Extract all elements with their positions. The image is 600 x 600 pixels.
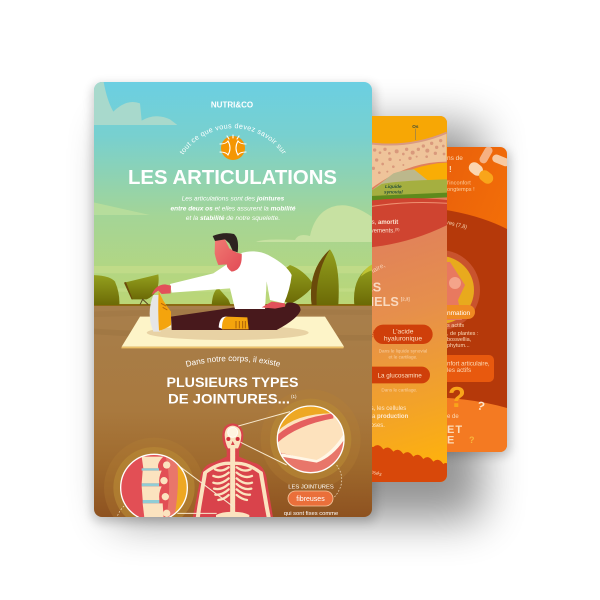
dashed connector: acide xyxy=(372,330,374,338)
label: liquide synovial: synovial xyxy=(384,189,403,194)
question mark: small: ? xyxy=(469,435,474,445)
scalloped wave xyxy=(372,445,447,482)
text: active ingredients: phytum... xyxy=(447,343,470,349)
label: les jointures: LES JOINTURES xyxy=(288,484,334,490)
shirt xyxy=(170,251,292,309)
icon: joint badge xyxy=(220,135,246,160)
pill: fibreuses: fibreuses xyxy=(296,496,325,503)
dark circular zone xyxy=(447,210,507,408)
panel: back card xyxy=(447,147,507,452)
intro fragment xyxy=(447,180,474,192)
intro paragraph: Les articulations sont des jointures xyxy=(182,196,285,202)
label: liquide synovial xyxy=(384,184,403,194)
hand on foot xyxy=(152,284,171,295)
drop shadow xyxy=(92,84,510,522)
hair xyxy=(213,233,238,252)
hand on knee xyxy=(262,302,285,309)
text: amortit: s, amortit xyxy=(372,220,398,226)
bush 2 xyxy=(124,274,159,305)
halo: right xyxy=(261,389,361,489)
box: comfort xyxy=(447,355,494,382)
arched subtitle: tout ce que vous devez savoir sur xyxy=(180,123,286,154)
text: amortit: vements. xyxy=(371,229,395,235)
caption: liquide synovial: et le cartilage. xyxy=(388,355,417,360)
box: comfort: nfort articulaire, xyxy=(447,360,490,368)
bottom orange zone xyxy=(447,398,507,452)
person xyxy=(150,233,301,332)
text: amortit: (9) xyxy=(395,228,399,232)
arched sentence: Dans notre corps, il existe xyxy=(186,356,280,367)
box: comfort: les actifs xyxy=(447,367,471,374)
panel: middle card xyxy=(372,116,447,482)
halo: left xyxy=(104,438,204,538)
pelvis xyxy=(216,512,249,523)
pill: inflammation xyxy=(447,305,475,319)
capsule: small top xyxy=(480,147,492,164)
body silhouette xyxy=(192,423,274,523)
zoom circle: spine xyxy=(121,453,190,523)
bush 3 xyxy=(212,288,231,305)
arc text fragment: laire, xyxy=(371,262,387,275)
caption: fibreuses: qui sont fixes comme xyxy=(284,511,338,517)
pill: glucosamine: La glucosamine xyxy=(378,372,422,379)
pill: acide hyaluronique: L'acide xyxy=(393,328,414,335)
caption: cartilage: Dans le cartilage. xyxy=(381,387,417,392)
text: active ingredients: , de plantes : xyxy=(447,331,479,337)
synovial green band xyxy=(370,179,447,196)
yellow wedge xyxy=(412,163,447,181)
text: active ingredients xyxy=(447,323,479,349)
section heading: PLUSIEURS TYPES xyxy=(166,375,298,390)
ground xyxy=(94,305,372,517)
text: cellules: oses. xyxy=(371,423,385,429)
section heading xyxy=(166,375,298,406)
heading fragment: ES xyxy=(364,281,381,295)
neck and face xyxy=(215,239,242,272)
grey cartilage xyxy=(370,169,427,192)
question mark: large: ? xyxy=(448,382,466,414)
bone top band xyxy=(372,116,447,158)
bush 6 xyxy=(354,265,373,305)
rear shoe xyxy=(219,317,249,329)
pill: inflammation: nmation xyxy=(447,310,471,317)
bottom text fragment xyxy=(447,414,462,444)
cloud: right xyxy=(256,205,372,242)
bone section xyxy=(370,133,447,189)
label: liquide synovial: Liquide xyxy=(385,184,402,189)
tree xyxy=(311,249,339,305)
panel: middle card: Os xyxy=(412,124,419,129)
top brand: NUTRI&CO xyxy=(211,100,253,110)
text: amortit xyxy=(372,220,400,232)
skull xyxy=(225,426,241,448)
zoom circle: fibrous joint xyxy=(273,400,347,477)
cloud: mid left xyxy=(90,202,150,215)
front shoe xyxy=(150,291,171,332)
question mark: white: ? xyxy=(476,398,486,414)
bottom text fragment: ET xyxy=(447,424,463,436)
mat shadow xyxy=(147,325,309,340)
text: cellules xyxy=(372,406,408,427)
mat xyxy=(121,317,344,348)
heading fragment: iels: [2,3] xyxy=(401,297,410,302)
cloud: top left xyxy=(90,80,177,125)
pill: glucosamine xyxy=(372,366,430,384)
footer fragment: osés xyxy=(370,469,383,478)
intro paragraph: et la stabilité de notre squelette. xyxy=(186,215,280,222)
arc heading fragment: res (7,8) xyxy=(447,220,468,231)
bottom text fragment: E xyxy=(447,434,454,446)
exclamation mark: ! xyxy=(449,165,452,174)
bush 1 xyxy=(90,275,119,305)
capsule: large xyxy=(468,162,494,184)
intro fragment: ongtemps ! xyxy=(447,187,475,193)
bush 4 xyxy=(266,265,314,303)
intro paragraph: entre deux os et elles assurent la mobilité xyxy=(170,206,296,212)
text: active ingredients: s actifs xyxy=(447,323,464,329)
zoom lines xyxy=(177,412,290,513)
knee illustration xyxy=(447,250,480,330)
intro paragraph xyxy=(170,196,296,222)
skeleton figure xyxy=(192,423,274,523)
speckles xyxy=(372,139,445,174)
caption: liquide synovial xyxy=(379,349,427,360)
dashed connector: left xyxy=(116,506,124,520)
legs xyxy=(171,303,301,330)
title: LES ARTICULATIONS xyxy=(128,167,337,189)
heading fragment: ns de xyxy=(447,155,463,162)
red band xyxy=(370,198,447,247)
section heading: (1) xyxy=(291,394,297,399)
intro fragment: l'inconfort xyxy=(447,180,471,186)
capsule: right xyxy=(492,154,507,166)
section heading: DE JOINTURES... xyxy=(168,392,290,406)
ground bands xyxy=(90,309,373,317)
pill: acide hyaluronique: hyaluronique xyxy=(384,336,422,343)
text: cellules: la production xyxy=(371,414,409,420)
horizon edge xyxy=(90,304,373,306)
caption: liquide synovial: Dans le liquide synovial xyxy=(379,349,427,354)
sky xyxy=(94,82,372,307)
dashed connector: fibreuses xyxy=(333,465,342,498)
panel: main card xyxy=(94,82,372,517)
bottom text fragment: e de xyxy=(447,414,459,420)
pill: acide hyaluronique xyxy=(373,325,433,344)
pill: fibreuses xyxy=(288,491,333,506)
light sky bands xyxy=(90,266,373,273)
label: Os xyxy=(415,128,416,140)
spine and ribs xyxy=(197,448,269,521)
text: active ingredients: boswellia, xyxy=(447,337,472,343)
text: cellules: s, les cellules xyxy=(371,406,406,412)
heading fragment: iels: IELS xyxy=(371,295,399,309)
